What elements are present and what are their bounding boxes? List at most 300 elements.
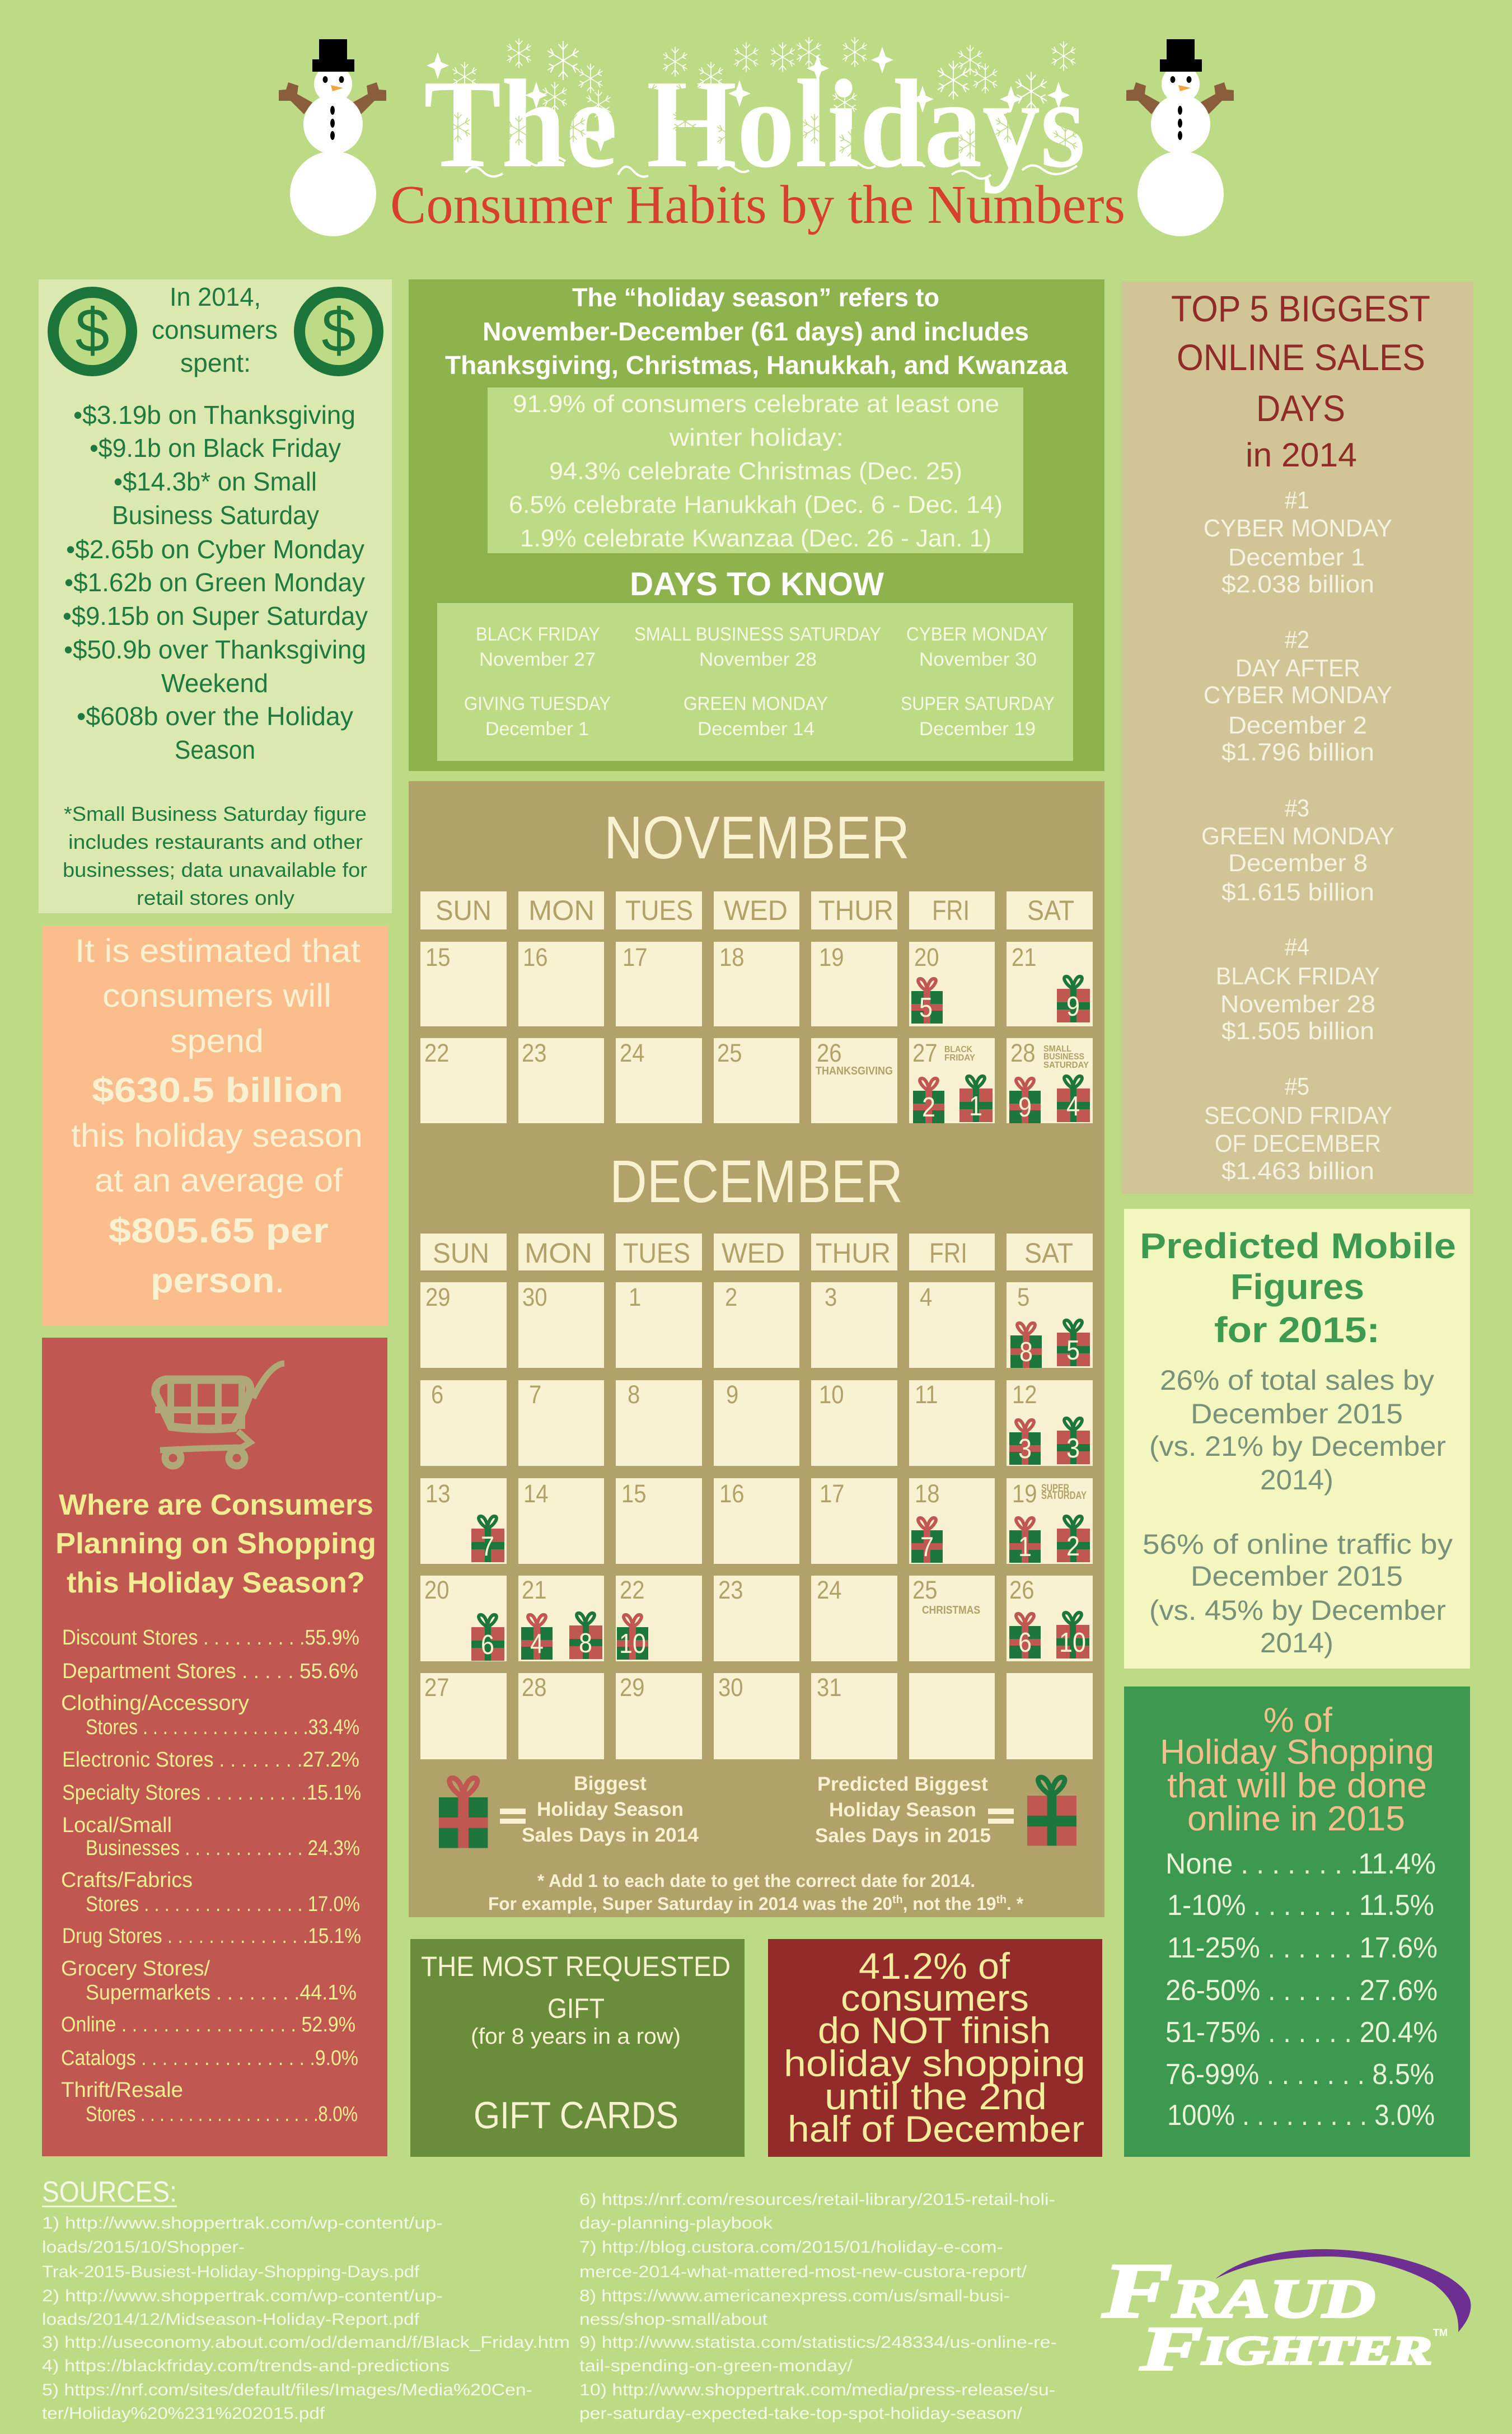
rank 5: #5	[1285, 1073, 1309, 1100]
December date numbers: 15	[621, 1480, 647, 1508]
celebration stats box: winter holiday:	[669, 424, 844, 451]
December gift markers: 5	[1066, 1334, 1080, 1366]
heading: November: NOVEMBER	[604, 803, 910, 871]
December date numbers: 10	[819, 1381, 844, 1409]
heading: DAYS	[1256, 387, 1345, 429]
letter ornaments	[427, 46, 1070, 152]
November gift markers: 4	[1066, 1090, 1080, 1122]
days to know box	[437, 603, 1073, 761]
days to know box: BLACK FRIDAY	[476, 624, 600, 645]
December gift markers: 7	[481, 1530, 494, 1562]
heading: Predicted Mobile	[1140, 1226, 1456, 1266]
online traffic stat: 56% of online traffic by	[1143, 1529, 1453, 1560]
heading: Figures	[1230, 1267, 1364, 1307]
store percentage list: Specialty Stores . . . . . . . . . .15.1%	[62, 1781, 361, 1805]
icon: right snowman	[1126, 39, 1234, 236]
December date numbers: 18	[915, 1480, 940, 1508]
celebration stats box: 91.9% of consumers celebrate at least one	[513, 390, 999, 418]
store percentage list: Stores . . . . . . . . . . . . . . . . 17.0%	[86, 1893, 360, 1916]
gift text: (for 8 years in a row)	[471, 2024, 681, 2049]
rank 2: DAY AFTER	[1235, 655, 1360, 682]
footnote: *Small Business Saturday figure	[64, 802, 367, 825]
December date numbers: 20	[424, 1576, 450, 1605]
December date numbers: 1	[629, 1283, 641, 1312]
spending list	[63, 400, 368, 764]
rank 5: $1.463 billion	[1221, 1157, 1374, 1185]
calendar date note: . *	[1007, 1894, 1024, 1914]
December event labels: SUPER	[1041, 1483, 1069, 1494]
calendar date note: th	[892, 1894, 903, 1906]
sources list: right column: day-planning-playbook	[579, 2214, 773, 2232]
online traffic stat: (vs. 45% by December	[1149, 1595, 1446, 1626]
percentage rows: 51-75% . . . . . . 20.4%	[1165, 2016, 1438, 2049]
rank 1	[1204, 487, 1392, 598]
November date numbers: 17	[622, 943, 648, 972]
legend: 2014 gift: Holiday Season	[537, 1798, 684, 1820]
sources list: left column: 3) http://useconomy.about.com/od/demand/f/Black_Friday.htm	[42, 2333, 570, 2352]
November event labels: BLACK	[944, 1045, 972, 1054]
estimate text: spend	[170, 1023, 264, 1059]
stat text	[784, 1945, 1085, 2150]
December event labels: CHRISTMAS	[922, 1604, 980, 1617]
celebration stats box	[488, 387, 1023, 553]
icon: right dollar coin: $	[321, 296, 356, 365]
logo arc	[1215, 2249, 1471, 2332]
sources list: left column: 5) https://nrf.com/sites/default/files/Images/Media%20Cen-	[42, 2381, 532, 2399]
icon: left snowman	[279, 39, 386, 236]
December date numbers	[424, 1283, 1037, 1702]
store percentage list: Local/Small	[62, 1814, 172, 1837]
November date numbers: 18	[719, 943, 745, 972]
spending list: •$2.65b on Cyber Monday	[66, 535, 364, 564]
spending list: •$9.15b on Super Saturday	[63, 601, 368, 630]
heading	[1171, 288, 1430, 474]
online traffic stat: 2014)	[1260, 1627, 1333, 1659]
intro heading: The “holiday season” refers to	[572, 283, 939, 312]
store percentage list: Discount Stores . . . . . . . . . .55.9%	[62, 1626, 359, 1650]
subtitle: Consumer Habits by the Numbers	[390, 175, 1125, 235]
store percentage list: Catalogs . . . . . . . . . . . . . . . . .9.0%	[61, 2047, 358, 2070]
store percentage list: Electronic Stores . . . . . . . .27.2%	[62, 1748, 359, 1772]
percentage rows: 76-99% . . . . . . . 8.5%	[1165, 2058, 1434, 2091]
November date numbers: 19	[819, 943, 844, 972]
heading: ONLINE SALES	[1177, 337, 1425, 378]
rank 2: #2	[1285, 626, 1309, 653]
November weekday headers	[420, 891, 1093, 929]
celebration stats box: 1.9% celebrate Kwanzaa (Dec. 26 - Jan. 1)	[520, 525, 991, 552]
heading: in 2014 consumers spent	[152, 282, 278, 377]
November date numbers: 25	[717, 1039, 742, 1068]
rank 3	[1201, 795, 1394, 906]
December gift markers: 4	[530, 1628, 544, 1659]
November weekday headers: WED	[724, 895, 788, 926]
icon: left dollar coin: $	[75, 296, 110, 365]
total sales stat	[1149, 1365, 1446, 1496]
sources list: right column: 8) https://www.americanexpress.com/us/small-busi-	[579, 2287, 1010, 2305]
November gift markers: 2	[922, 1091, 935, 1123]
icon: left dollar coin	[53, 292, 132, 371]
spending list: •$50.9b over Thanksgiving	[64, 635, 366, 664]
December date numbers: 25	[912, 1576, 938, 1605]
heading: in 2014 consumers spent: consumers	[152, 315, 278, 344]
December gift markers: 2	[1066, 1530, 1080, 1562]
December gift markers: 3	[1066, 1432, 1080, 1464]
store percentage list: Clothing/Accessory	[61, 1692, 249, 1715]
logo: Fraud Fighter: TM	[1433, 2327, 1448, 2338]
heading: this Holiday Season?	[67, 1567, 365, 1599]
days to know heading: DAYS TO KNOW	[630, 566, 884, 602]
November gift markers: 1	[969, 1090, 982, 1122]
December date numbers: 24	[817, 1576, 842, 1605]
store percentage list: Businesses . . . . . . . . . . . . 24.3%	[86, 1837, 360, 1860]
sources list: left column: 2) http://www.shoppertrak.com/wp-content/up-	[42, 2287, 443, 2305]
snowflakes over letters	[446, 79, 1077, 158]
heading: in 2014 consumers spent: In 2014,	[170, 282, 261, 311]
December event labels: SATURDAY	[1041, 1490, 1087, 1502]
December gift markers	[471, 1320, 1090, 1661]
days to know box: SUPER SATURDAY	[901, 693, 1055, 714]
legend: 2014 gift: Biggest	[574, 1773, 647, 1795]
store percentage list	[61, 1626, 361, 2126]
December gift markers: 10	[1059, 1627, 1086, 1658]
November date cells	[420, 942, 1093, 1123]
heading: that will be done	[1167, 1767, 1427, 1805]
intro heading	[445, 283, 1068, 380]
estimate text: this holiday season	[71, 1118, 363, 1154]
store percentage list: Thrift/Resale	[61, 2078, 183, 2102]
percentage rows: None . . . . . . . .11.4%	[1165, 1848, 1436, 1880]
rank 2: December 2	[1228, 712, 1367, 739]
December date numbers: 6	[431, 1381, 443, 1409]
calendar date note: * Add 1 to each date to get the correct date for 2014.	[537, 1871, 975, 1891]
spending list: •$14.3b* on Small	[114, 467, 317, 496]
total sales stat: December 2015	[1191, 1398, 1403, 1429]
December date numbers: 30	[718, 1674, 743, 1702]
legend: 2014 gift: Sales Days in 2014	[522, 1824, 699, 1846]
December date numbers: 4	[920, 1283, 932, 1312]
December gift markers: 8	[579, 1627, 592, 1659]
November weekday headers: MON	[528, 895, 594, 926]
gift text: THE MOST REQUESTED	[421, 1951, 731, 1982]
December date numbers: 7	[529, 1381, 541, 1409]
sources list: left column: loads/2015/10/Shopper-	[42, 2238, 245, 2257]
rank 4: $1.505 billion	[1221, 1017, 1374, 1045]
December weekday headers: TUES	[623, 1237, 690, 1269]
November date numbers: 16	[523, 943, 548, 972]
November weekday headers: FRI	[932, 895, 970, 926]
December date numbers: 12	[1012, 1381, 1037, 1409]
rank 1: CYBER MONDAY	[1204, 515, 1392, 542]
December date cells	[420, 1282, 1093, 1759]
panel: estimated spend	[42, 926, 388, 1326]
heading: online in 2015	[1187, 1800, 1405, 1838]
December date numbers: 29	[425, 1283, 451, 1312]
sources list: left column: 4) https://blackfriday.com/trends-and-predictions	[42, 2357, 450, 2375]
November weekday headers: SAT	[1027, 895, 1074, 926]
footnote: includes restaurants and other	[68, 830, 363, 853]
days to know box: November 27	[479, 649, 596, 670]
spending list: •$608b over the Holiday	[77, 702, 353, 731]
legend: 2015 gift: Holiday Season	[829, 1799, 976, 1821]
rank 2: $1.796 billion	[1221, 739, 1374, 766]
November date numbers: 28	[1010, 1039, 1036, 1068]
days to know box: GIVING TUESDAY	[464, 693, 611, 714]
November weekday headers: TUES	[625, 895, 693, 926]
logo wordmark: F RAUD	[1102, 2248, 1375, 2334]
December gift markers: 7	[920, 1531, 934, 1562]
heading	[1140, 1226, 1456, 1350]
heading: TOP 5 BIGGEST	[1171, 288, 1430, 329]
November date numbers: 22	[424, 1039, 450, 1068]
online traffic stat	[1143, 1529, 1453, 1659]
November date numbers: 26	[817, 1039, 842, 1068]
percentage rows: 1-10% . . . . . . . 11.5%	[1167, 1889, 1434, 1922]
logo: Fraud Fighter: F	[1140, 2314, 1202, 2384]
November date numbers: 20	[914, 943, 939, 972]
spending list: •$1.62b on Green Monday	[64, 568, 365, 597]
days to know box: December 1	[485, 718, 589, 740]
November event labels	[816, 1044, 1089, 1077]
November gift markers: 9	[1018, 1091, 1032, 1123]
sources heading: SOURCES:	[42, 2176, 177, 2208]
spending list: Season	[175, 735, 255, 764]
spending list: •$9.1b on Black Friday	[90, 433, 341, 462]
rank 2: CYBER MONDAY	[1204, 681, 1392, 709]
December weekday headers: WED	[722, 1237, 785, 1269]
December date numbers: 2	[725, 1283, 737, 1312]
footnote: businesses; data unavailable for	[63, 858, 367, 881]
November event labels: SMALL	[1043, 1044, 1071, 1054]
December gift markers: 3	[1018, 1433, 1032, 1464]
intro heading: Thanksgiving, Christmas, Hanukkah, and Kwanzaa	[445, 351, 1068, 380]
heading: for 2015:	[1214, 1310, 1380, 1350]
panel: most requested gift	[410, 1939, 745, 2157]
rank 3: December 8	[1228, 849, 1368, 877]
heading: % of	[1263, 1701, 1333, 1740]
December date numbers: 8	[628, 1381, 640, 1409]
estimate text: person.	[151, 1262, 285, 1300]
days to know box: GREEN MONDAY	[684, 693, 828, 714]
calendar date note: For example, Super Saturday in 2014 was the 20	[488, 1894, 897, 1914]
December weekday headers: MON	[525, 1237, 592, 1269]
rank 5	[1204, 1073, 1392, 1185]
store percentage list: Grocery Stores/	[61, 1957, 210, 1980]
November date numbers: 15	[425, 943, 451, 972]
December gift markers: 8	[1019, 1336, 1033, 1367]
December weekday headers: SAT	[1024, 1237, 1073, 1269]
sources list: left column: Trak-2015-Busiest-Holiday-Shopping-Days.pdf	[42, 2263, 420, 2281]
estimate text: at an average of	[95, 1162, 343, 1199]
heading: Where are Consumers	[59, 1489, 373, 1521]
footnote	[63, 802, 367, 909]
November event labels: THANKSGIVING	[816, 1065, 893, 1077]
December date numbers: 14	[523, 1480, 549, 1508]
store percentage list: Drug Stores . . . . . . . . . . . . . .15.1%	[62, 1924, 361, 1948]
total sales stat: 26% of total sales by	[1160, 1365, 1434, 1396]
December event labels	[922, 1483, 1087, 1617]
heading	[1160, 1701, 1434, 1838]
percentage rows: 11-25% . . . . . . 17.6%	[1167, 1932, 1438, 1964]
celebration stats box: 6.5% celebrate Hanukkah (Dec. 6 - Dec. 14)	[509, 491, 1003, 518]
calendar date note	[488, 1871, 1024, 1914]
intro heading: November-December (61 days) and includes	[483, 317, 1029, 346]
legend: 2014 gift	[439, 1773, 699, 1848]
December date numbers: 23	[718, 1576, 743, 1605]
percentage rows	[1165, 1848, 1438, 2132]
panel: calendar	[409, 781, 1104, 1917]
store percentage list: Department Stores . . . . . 55.6%	[62, 1660, 358, 1683]
rank 1: December 1	[1228, 544, 1365, 571]
online traffic stat: December 2015	[1191, 1561, 1403, 1592]
sources list: left column: loads/2014/12/Midseason-Holiday-Report.pdf	[42, 2310, 420, 2329]
percentage rows: 26-50% . . . . . . 27.6%	[1165, 1974, 1438, 2007]
spending list: Weekend	[161, 669, 268, 698]
December gift markers: 1	[1018, 1531, 1032, 1562]
days to know box: December 19	[919, 718, 1036, 740]
stat text: half of December	[788, 2108, 1084, 2150]
December gift markers: 10	[619, 1628, 646, 1659]
December date numbers: 16	[719, 1480, 745, 1508]
December gift markers: 6	[1018, 1627, 1032, 1658]
December date numbers: 5	[1017, 1283, 1029, 1312]
sources list: right column	[579, 2190, 1057, 2423]
December date numbers: 30	[522, 1283, 547, 1312]
November event labels: SATURDAY	[1043, 1061, 1089, 1070]
title text: The Holidays	[424, 54, 1085, 194]
rank 5: OF DECEMBER	[1215, 1130, 1381, 1157]
title: The Holidays	[424, 38, 1085, 194]
December date numbers: 31	[817, 1674, 842, 1702]
sources list: right column: 7) http://blog.custora.com/2015/01/holiday-e-com-	[579, 2238, 1003, 2257]
rank 3: $1.615 billion	[1221, 879, 1374, 906]
heading: Planning on Shopping	[55, 1527, 376, 1560]
panel: holiday season definition	[409, 279, 1104, 771]
panel: 2014 consumer spending	[39, 279, 392, 913]
days to know box: December 14	[698, 718, 814, 740]
November date numbers: 23	[522, 1039, 547, 1068]
estimate text: consumers will	[102, 978, 331, 1014]
November date numbers	[424, 943, 1037, 1068]
heading	[55, 1489, 376, 1599]
store percentage list: Stores . . . . . . . . . . . . . . . . .33.4%	[86, 1716, 359, 1739]
panel: predicted mobile figures	[1124, 1209, 1470, 1669]
legend: 2015 gift: Predicted Biggest	[817, 1773, 988, 1795]
estimate text: $630.5 billion	[92, 1071, 343, 1110]
December gift markers: 6	[481, 1629, 494, 1660]
logo: Fraud Fighter	[1102, 2248, 1471, 2384]
sources list: right column: tail-spending-on-green-monday/	[579, 2357, 853, 2375]
stat text: consumers	[841, 1977, 1029, 2019]
November gift markers: 9	[1066, 991, 1080, 1022]
icon: shopping cart	[155, 1363, 284, 1466]
gift text: GIFT	[547, 1993, 605, 2024]
rank 5: SECOND FRIDAY	[1204, 1102, 1392, 1129]
sources list: right column: ness/shop-small/about	[579, 2310, 768, 2329]
sources list: left column	[42, 2214, 570, 2423]
rank 4	[1216, 933, 1380, 1045]
December date numbers: 21	[522, 1576, 547, 1605]
days to know box: November 30	[919, 649, 1037, 670]
November weekday headers: SUN	[436, 895, 491, 926]
December weekday headers	[420, 1234, 1093, 1270]
rank 2	[1204, 626, 1392, 766]
December date numbers: 29	[620, 1674, 645, 1702]
rank 3: #3	[1285, 795, 1309, 822]
logo: Fraud Fighter: IGHTER	[1201, 2328, 1432, 2373]
rank 4: BLACK FRIDAY	[1216, 963, 1380, 990]
days to know box: November 28	[699, 649, 817, 670]
sources list: left column: 1) http://www.shoppertrak.com/wp-content/up-	[42, 2214, 443, 2232]
total sales stat: 2014)	[1260, 1464, 1333, 1496]
estimate text	[71, 933, 363, 1300]
December date numbers: 22	[620, 1576, 645, 1605]
calendar date note: , not the 19	[903, 1894, 996, 1914]
footnote: retail stores only	[137, 886, 294, 909]
November date numbers: 24	[620, 1039, 645, 1068]
rank 4: November 28	[1220, 991, 1375, 1018]
sources list: right column: per-saturday-expected-take-top-spot-holiday-season/	[579, 2404, 1023, 2423]
days to know box: CYBER MONDAY	[906, 624, 1048, 645]
rank 1: $2.038 billion	[1221, 571, 1374, 598]
gift text: GIFT CARDS	[474, 2094, 678, 2137]
stat text: holiday shopping	[784, 2043, 1085, 2084]
days to know box: SMALL BUSINESS SATURDAY	[634, 624, 881, 645]
heading: December: DECEMBER	[610, 1147, 903, 1215]
December date numbers: 26	[1009, 1576, 1034, 1605]
December date numbers: 28	[522, 1674, 547, 1702]
November event labels: BUSINESS	[1043, 1052, 1084, 1062]
panel: holiday shopping done online	[1124, 1686, 1470, 2157]
heading: Holiday Shopping	[1160, 1733, 1434, 1772]
stat text: until the 2nd	[825, 2076, 1047, 2117]
December weekday headers: FRI	[929, 1237, 967, 1269]
snow drift waves	[466, 157, 1077, 179]
gift text	[421, 1951, 731, 2137]
December weekday headers: THUR	[816, 1237, 891, 1269]
falling snowflakes	[453, 38, 1075, 119]
store percentage list: Supermarkets . . . . . . . .44.1%	[86, 1981, 357, 2005]
sources list: right column: 9) http://www.statista.com/statistics/248334/us-online-re-	[579, 2333, 1057, 2352]
store percentage list: Stores . . . . . . . . . . . . . . . . . . .8.0%	[86, 2103, 358, 2126]
estimate text: $805.65 per	[109, 1212, 329, 1250]
store percentage list: Online . . . . . . . . . . . . . . . . . 52.9%	[61, 2013, 355, 2036]
December date numbers: 11	[915, 1381, 938, 1409]
total sales stat: (vs. 21% by December	[1149, 1431, 1446, 1462]
sources list: right column: merce-2014-what-mattered-most-new-custora-report/	[579, 2263, 1027, 2281]
celebration stats box: 94.3% celebrate Christmas (Dec. 25)	[549, 457, 962, 485]
December date numbers: 17	[820, 1480, 845, 1508]
rank 3: GREEN MONDAY	[1201, 823, 1394, 850]
legend: 2015 gift	[815, 1773, 1076, 1847]
calendar date note: th	[996, 1894, 1007, 1906]
spending list: Business Saturday	[112, 501, 319, 530]
December date numbers: 9	[726, 1381, 738, 1409]
November date numbers: 27	[912, 1039, 938, 1068]
estimate text: It is estimated that	[75, 933, 361, 969]
November date numbers: 21	[1012, 943, 1037, 972]
November gift markers: 5	[919, 992, 933, 1023]
panel: late shopping stat	[768, 1939, 1102, 2157]
heading: in 2014 consumers spent: spent:	[180, 348, 251, 377]
December date numbers: 27	[424, 1674, 450, 1702]
sources list: right column: 6) https://nrf.com/resources/retail-library/2015-retail-holi-	[579, 2190, 1055, 2209]
rank 4: #4	[1285, 933, 1309, 961]
December weekday headers: SUN	[433, 1237, 489, 1269]
store percentage list: Crafts/Fabrics	[61, 1868, 193, 1892]
December date numbers: 3	[825, 1283, 837, 1312]
November weekday headers: THUR	[818, 895, 893, 926]
panel: where consumers shop	[42, 1338, 387, 2156]
